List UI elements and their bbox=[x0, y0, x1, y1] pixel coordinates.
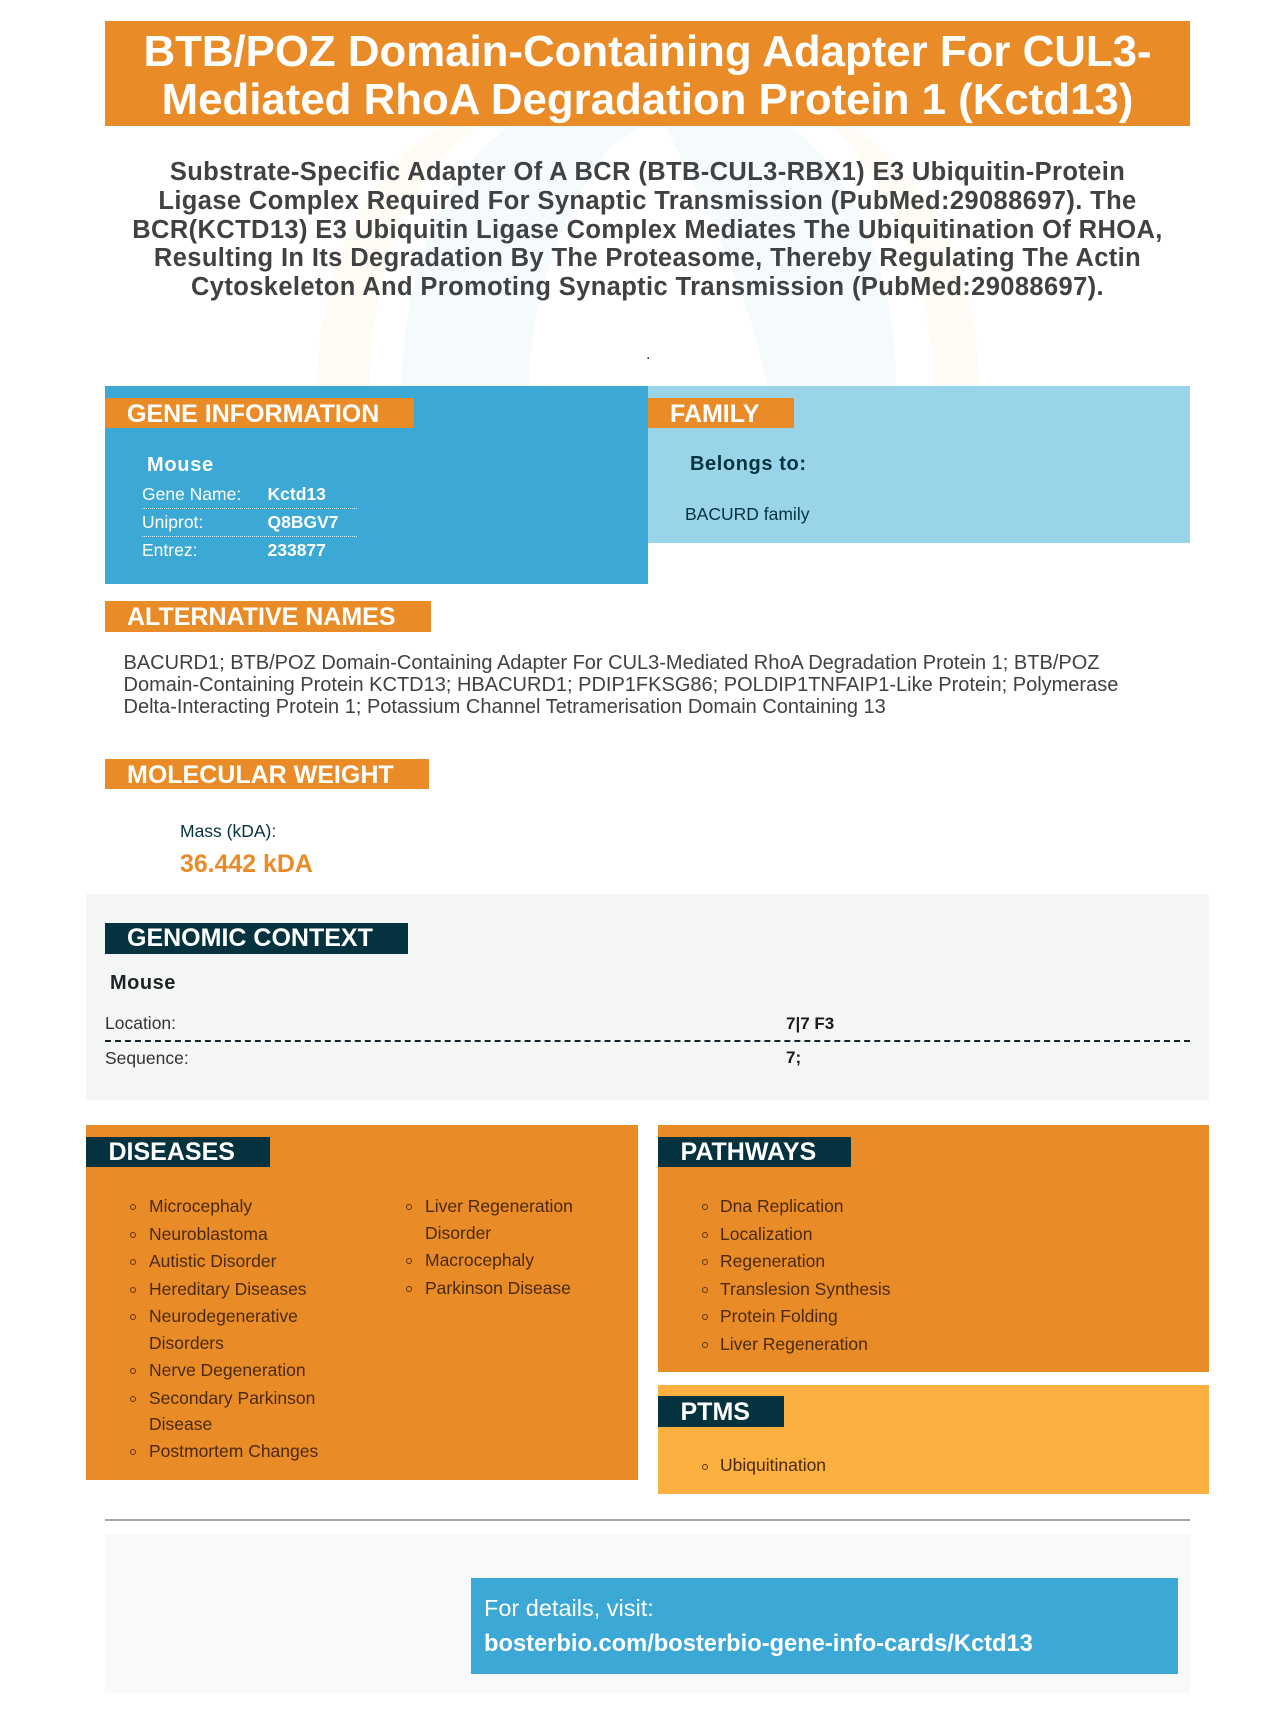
panel: gene information bbox=[105, 386, 648, 584]
alternative names text: Delta-Interacting Protein 1; Potassium Channel Tetramerisation Domain Containing 13 bbox=[124, 696, 886, 718]
disease list column two: Disorder bbox=[425, 1223, 491, 1243]
heading: diseases bbox=[86, 1137, 270, 1167]
entrez row: 233877 bbox=[268, 540, 326, 560]
heading: pathways: PATHWAYS bbox=[680, 1138, 816, 1166]
uniprot row: Q8BGV7 bbox=[268, 512, 338, 532]
ptm list: Ubiquitination bbox=[720, 1455, 826, 1475]
summary text: Cytoskeleton And Promoting Synaptic Transmission (PubMed:29088697). bbox=[191, 273, 1104, 301]
entrez row: Entrez: bbox=[142, 540, 197, 560]
pathway list: Regeneration bbox=[720, 1251, 825, 1271]
summary text: Resulting In Its Degradation By The Proteasome, Thereby Regulating The Actin bbox=[154, 244, 1141, 272]
panel: footer bbox=[105, 1534, 1190, 1693]
heading: gene information: GENE INFORMATION bbox=[127, 400, 379, 428]
summary text: BCR(KCTD13) E3 Ubiquitin Ligase Complex Mediates The Ubiquitination Of RHOA, bbox=[132, 216, 1163, 244]
heading: alternative names: ALTERNATIVE NAMES bbox=[127, 603, 396, 631]
disease list column one: Disease bbox=[149, 1414, 212, 1434]
pathway list: Translesion Synthesis bbox=[720, 1279, 891, 1299]
sequence row: 7; bbox=[786, 1048, 801, 1067]
heading: pathways bbox=[658, 1137, 851, 1167]
disease list column one: Autistic Disorder bbox=[149, 1251, 276, 1271]
heading: family: FAMILY bbox=[670, 400, 759, 428]
summary period mark: . bbox=[646, 346, 650, 363]
heading: molecular weight: MOLECULAR WEIGHT bbox=[127, 761, 394, 789]
uniprot row: Uniprot: bbox=[142, 512, 203, 532]
location row: Location: bbox=[105, 1013, 176, 1033]
title banner bbox=[105, 21, 1190, 126]
disease list column two: Liver Regeneration bbox=[425, 1196, 573, 1216]
alternative names text: BACURD1; BTB/POZ Domain-Containing Adapter For CUL3-Mediated RhoA Degradation Protein 1; BTB/POZ bbox=[124, 652, 1100, 674]
family value: BACURD family bbox=[685, 504, 809, 524]
summary text: Substrate-Specific Adapter Of A BCR (BTB-CUL3-RBX1) E3 Ubiquitin-Protein bbox=[170, 158, 1125, 186]
disease list column one bbox=[130, 1196, 318, 1461]
mass label: Mass (kDA): bbox=[180, 821, 276, 841]
location row: 7|7 F3 bbox=[786, 1014, 834, 1033]
pathway list: Protein Folding bbox=[720, 1306, 838, 1326]
callout: details link bbox=[471, 1578, 1178, 1674]
gene name row: Gene Name: bbox=[142, 484, 241, 504]
pathway list: Localization bbox=[720, 1224, 812, 1244]
panel: family bbox=[648, 386, 1190, 543]
species label: Mouse bbox=[110, 972, 176, 994]
pathway list: Liver Regeneration bbox=[720, 1334, 868, 1354]
summary text bbox=[132, 158, 1163, 301]
disease list column one: Microcephaly bbox=[149, 1196, 252, 1216]
alternative names text: Domain-Containing Protein KCTD13; HBACURD1; PDIP1FKSG86; POLDIP1TNFAIP1-Like Protein; Polymerase bbox=[124, 674, 1118, 696]
heading: ptms bbox=[658, 1396, 784, 1427]
disease list column one: Nerve Degeneration bbox=[149, 1360, 306, 1380]
panel: ptms bbox=[658, 1385, 1209, 1494]
disease list column one: Neurodegenerative bbox=[149, 1306, 298, 1326]
mass value: 36.442 kDA bbox=[180, 850, 313, 878]
disease list column two: Parkinson Disease bbox=[425, 1278, 571, 1298]
alternative names text bbox=[124, 652, 1118, 718]
disease list column one: Hereditary Diseases bbox=[149, 1279, 307, 1299]
heading: diseases: DISEASES bbox=[108, 1138, 235, 1166]
gene name row bbox=[142, 484, 357, 509]
panel: diseases bbox=[86, 1125, 638, 1480]
gene name row: Kctd13 bbox=[268, 484, 326, 504]
species label: Mouse bbox=[147, 454, 214, 476]
disease list column one: Disorders bbox=[149, 1333, 224, 1353]
watermark: faint logo behind summary bbox=[317, 126, 979, 386]
disease list column two bbox=[406, 1196, 573, 1298]
sequence row bbox=[105, 1048, 801, 1068]
callout label: For details, visit: bbox=[484, 1595, 654, 1621]
heading: genomic context: GENOMIC CONTEXT bbox=[127, 924, 373, 952]
title banner: Mediated RhoA Degradation Protein 1 (Kctd13) bbox=[162, 75, 1133, 124]
heading: ptms: PTMS bbox=[680, 1398, 750, 1426]
panel: pathways bbox=[658, 1125, 1209, 1372]
title banner: BTB/POZ Domain-Containing Adapter For CUL3- bbox=[143, 27, 1152, 76]
pathway list bbox=[702, 1196, 891, 1354]
callout url: bosterbio.com/bosterbio-gene-info-cards/Kctd13 bbox=[484, 1631, 1033, 1657]
location row bbox=[105, 1013, 1190, 1042]
panel: genomic context bbox=[86, 894, 1209, 1100]
summary text: Ligase Complex Required For Synaptic Transmission (PubMed:29088697). The bbox=[158, 187, 1137, 215]
belongs to label: Belongs to: bbox=[690, 453, 807, 475]
sequence row: Sequence: bbox=[105, 1048, 189, 1068]
disease list column two: Macrocephaly bbox=[425, 1250, 534, 1270]
entrez row bbox=[142, 540, 326, 560]
pathway list: Dna Replication bbox=[720, 1196, 844, 1216]
footer divider line bbox=[105, 1519, 1190, 1521]
disease list column one: Neuroblastoma bbox=[149, 1224, 268, 1244]
heading: family bbox=[648, 398, 794, 428]
disease list column one: Secondary Parkinson bbox=[149, 1388, 315, 1408]
uniprot row bbox=[142, 512, 357, 537]
disease list column one: Postmortem Changes bbox=[149, 1441, 318, 1461]
